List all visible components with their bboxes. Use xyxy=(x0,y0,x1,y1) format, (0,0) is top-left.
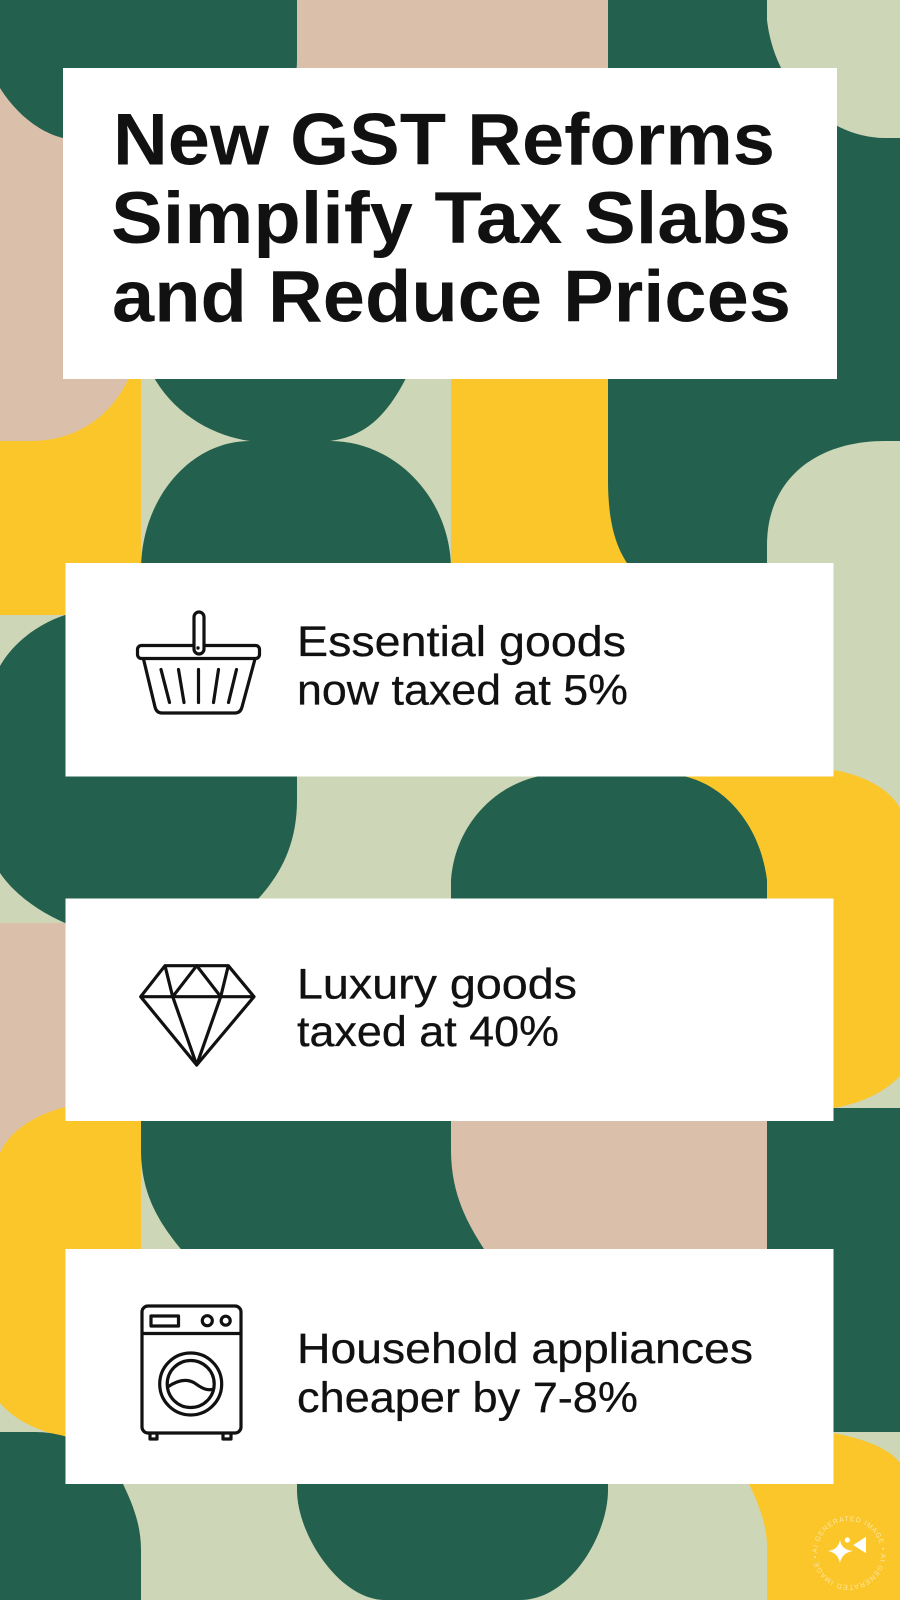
title xyxy=(111,98,791,338)
text: essential goods: now taxed at 5% xyxy=(297,666,628,714)
text: luxury goods xyxy=(297,960,577,1056)
title: Simplify Tax Slabs xyxy=(111,176,791,259)
text: luxury goods: Luxury goods xyxy=(297,960,577,1008)
title: New GST Reforms xyxy=(113,98,775,180)
text: luxury goods: taxed at 40% xyxy=(297,1008,559,1056)
panel: luxury goods xyxy=(66,898,834,1121)
icon: diamond xyxy=(141,966,254,1065)
text: essential goods: Essential goods xyxy=(297,618,626,666)
title: and Reduce Prices xyxy=(112,254,791,338)
icon: washing machine xyxy=(142,1306,241,1439)
text: household appliances: cheaper by 7-8% xyxy=(297,1374,638,1422)
text: household appliances xyxy=(297,1325,753,1422)
text: essential goods xyxy=(297,618,628,714)
panel: essential goods xyxy=(66,563,834,776)
panel: title xyxy=(63,68,837,379)
icon: shopping basket xyxy=(138,612,260,713)
watermark: AI generated image badge: AI GENERATED IMAGE • AI GENERATED IMAGE • xyxy=(812,1516,886,1590)
text: household appliances: Household appliances xyxy=(297,1325,753,1373)
panel: household appliances xyxy=(66,1249,834,1484)
